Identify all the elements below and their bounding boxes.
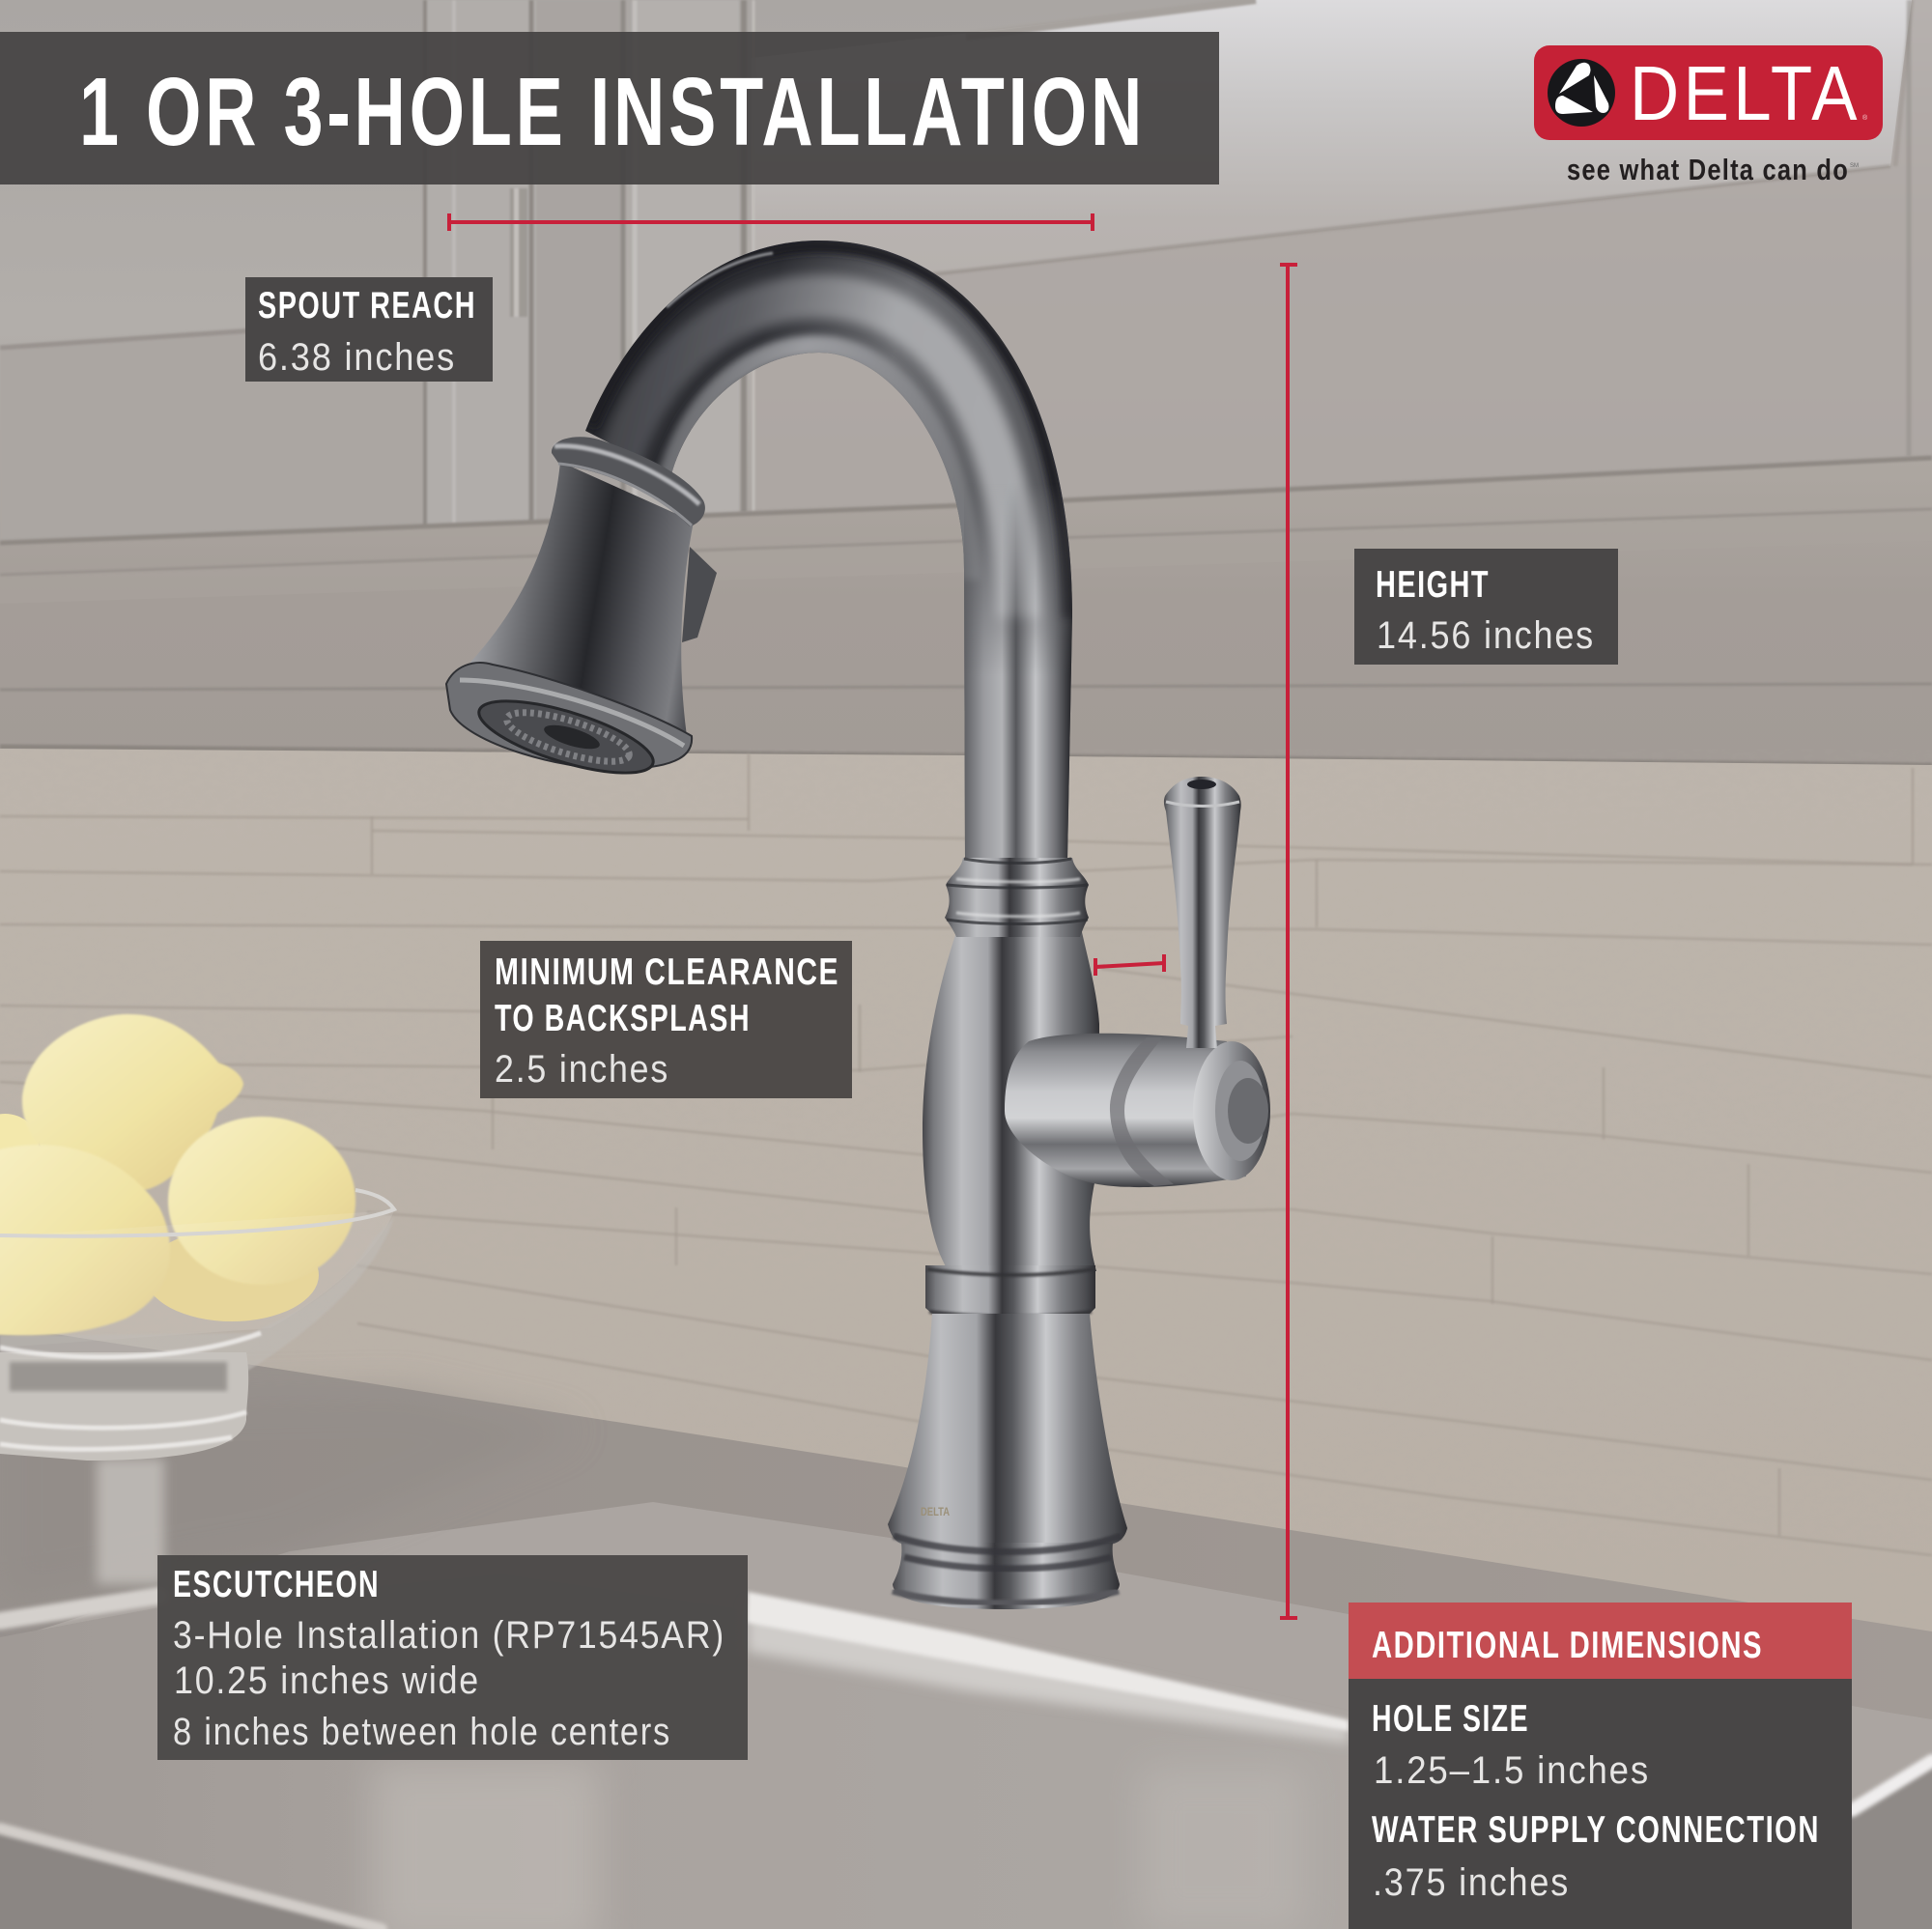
spray head bell [465,462,694,736]
tagline: see what Delta can do [1567,153,1849,186]
title text: 1 OR 3-HOLE INSTALLATION [79,58,1146,166]
gooseneck spout [570,232,1082,869]
lemon: left [0,1145,170,1336]
dimension line: minimum clearance [1095,954,1164,976]
logo badge [1534,45,1883,140]
panel: spout reach [245,277,493,382]
hub ring [1110,1037,1174,1186]
logo triangle mark [1548,59,1615,127]
glass bowl [0,1190,394,1461]
lemon: top [22,1014,243,1190]
cabinet hinge [510,188,527,317]
clearance value: 2.5 inches [495,1048,669,1091]
handle hub [1005,1034,1270,1187]
spray head collar [552,437,705,526]
escutcheon label: ESCUTCHEON [173,1564,380,1605]
dimension line: height [1280,263,1297,1620]
upper cabinets, right [0,0,1932,541]
spray head rim [446,663,692,769]
title banner [0,32,1219,184]
panel: escutcheon [157,1555,748,1760]
logo wordmark: DELTA [1630,50,1861,136]
lemon: right [168,1117,355,1285]
base foot [893,1536,1121,1609]
clearance label line 2: TO BACKSPLASH [495,998,751,1039]
additional dimensions body [1349,1679,1852,1929]
body upper [923,932,1099,1271]
spray jets [502,702,634,772]
hub end cap face [1228,1078,1268,1144]
Delta logo [1534,45,1883,186]
panel: minimum clearance [480,941,852,1098]
height label: HEIGHT [1376,564,1490,606]
escutcheon line 3: 8 inches between hole centers [173,1711,671,1753]
spray head highlight ring [460,680,684,746]
hub end cap inner ring [1215,1061,1265,1161]
hub end cap [1193,1041,1270,1180]
panel: height [1354,549,1618,665]
dimension line: spout reach [447,213,1094,231]
escutcheon line 1: 3-Hole Installation (RP71545AR) [173,1614,725,1657]
additional dimensions header [1349,1603,1852,1679]
clearance label line 1: MINIMUM CLEARANCE [495,951,839,993]
panel: additional dimensions [1349,1603,1852,1929]
bowl reflection on counter [97,1459,164,1584]
body middle band [925,1265,1095,1317]
service mark: SM [1850,163,1859,169]
sink basin [0,1574,1932,1929]
body lower flare [888,1314,1127,1546]
lever handle [1164,777,1241,1048]
registered mark: ® [1862,114,1868,122]
faucet [446,232,1270,1609]
escutcheon line 2: 10.25 inches wide [174,1660,480,1702]
hole size label: HOLE SIZE [1372,1698,1529,1740]
countertop [0,1325,1932,1929]
spout reach value: 6.38 inches [258,336,456,379]
additional dimensions heading: ADDITIONAL DIMENSIONS [1372,1625,1763,1666]
spray nozzle [542,721,602,753]
lemon: back left [0,1114,39,1176]
spray face [472,687,660,787]
crown trim bands [0,458,1932,768]
body top collar [945,858,1089,937]
tile backsplash [0,749,1932,1642]
hole size value: 1.25–1.5 inches [1374,1749,1650,1792]
lemons in glass bowl [0,1014,394,1461]
spray trigger [682,547,717,642]
spout reach label: SPOUT REACH [258,285,476,326]
water supply value: .375 inches [1373,1861,1570,1904]
upper cabinets, left stiles and doors [0,0,753,542]
brand mark on base: DELTA [921,1505,950,1518]
lemon: back centre [145,1229,319,1321]
height value: 14.56 inches [1377,614,1595,657]
